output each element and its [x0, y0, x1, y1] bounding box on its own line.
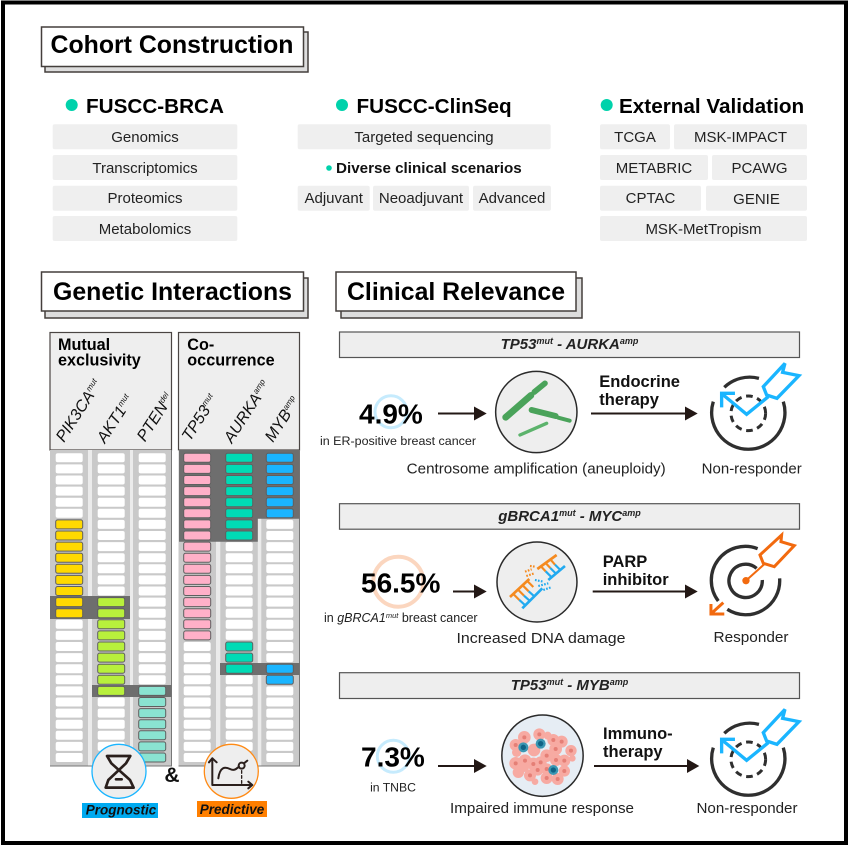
heading: Cohort Construction: Cohort Construction [50, 31, 294, 59]
panel: External Validation: GENIE [733, 191, 780, 208]
gene label: PIK3CA mut: mut [84, 376, 99, 393]
header: TP53 mut - MYB amp: - MYB [563, 677, 610, 694]
icon: DNA damage [497, 542, 577, 622]
panel: FUSCC-BRCA: Genomics [111, 129, 179, 146]
header: gBRCA1 mut - MYC amp: gBRCA1 [498, 508, 559, 525]
panel: External Validation: External Validation [619, 95, 804, 118]
header: TP53 mut - AURKA amp: amp [620, 336, 639, 346]
caption: Impaired immune response: Impaired immune response [450, 801, 634, 817]
gene label: TP53 mut: TP53 [179, 403, 214, 444]
panel: Co-occurrence [178, 332, 304, 766]
caption: Centrosome amplification: Centrosome amplification (aneuploidy) [407, 462, 666, 478]
arrow [594, 759, 699, 773]
panel: External Validation [600, 95, 807, 241]
panel: External Validation: CPTAC [626, 190, 676, 207]
ampersand: & [164, 764, 180, 787]
header: gBRCA1 mut - MYC amp: amp [622, 508, 641, 518]
column: AURKA cells [226, 453, 253, 762]
label: therapy Endocrine: Endocrine [599, 373, 680, 391]
panel: FUSCC-BRCA: Proteomics [107, 190, 183, 207]
panel: FUSCC-ClinSeq: Targeted sequencing [354, 129, 494, 146]
arrow [593, 584, 698, 598]
gene label: TP53 mut: mut [200, 391, 215, 408]
panel: FUSCC-ClinSeq: Adjuvant [305, 190, 364, 207]
panel: FUSCC-BRCA: Transcriptomics [92, 160, 198, 177]
label: Immunotherapy: therapy [603, 743, 663, 761]
column: AKT1 cells [98, 453, 125, 762]
header: gBRCA1 mut - MYC amp [340, 504, 800, 529]
header: gBRCA1 mut - MYC amp: mut [559, 508, 577, 518]
icon: prognostic hourglass [92, 744, 146, 798]
header: TP53 mut - MYB amp: amp [610, 677, 629, 687]
gene label: MYB amp: MYB [262, 407, 295, 445]
panel: FUSCC-ClinSeq: Diverse clinical scenarios [336, 160, 522, 177]
panel: FUSCC-ClinSeq [298, 95, 551, 211]
gene label: PIK3CA mut: PIK3CA [53, 388, 98, 445]
column: PIK3CA cells [56, 453, 83, 762]
panel: External Validation: MSK-IMPACT [694, 129, 787, 146]
label: PARP inhibitor [603, 553, 669, 589]
stat: 56.5 percent: 56.5% [361, 568, 440, 598]
label: Immunotherapy: Immuno- [603, 725, 673, 743]
icon: non-responder target [712, 709, 799, 795]
icon: responder target [711, 535, 794, 615]
caption: Increased DNA damage: Increased DNA damage [456, 631, 626, 647]
panel: Mutual exclusivity: Mutual [58, 336, 110, 354]
header: TP53 mut - MYB amp [340, 673, 800, 698]
arrow [438, 406, 487, 420]
caption: Responder: Responder [714, 630, 789, 646]
caption: in gBRCA1 mut breast cancer: in gBRCA1 [324, 611, 386, 625]
heading: Genetic Interactions: Genetic Interactions [53, 278, 292, 306]
panel: External Validation: METABRIC [616, 160, 692, 177]
panel: Co-occurrence: occurrence [187, 352, 275, 370]
icon: centrosome chromosomes [496, 371, 577, 453]
panel: External Validation: PCAWG [731, 160, 788, 177]
label: PARP inhibitor: inhibitor [603, 571, 669, 589]
label: therapy Endocrine: therapy [599, 391, 660, 409]
column: MYB cells [266, 453, 293, 762]
panel: FUSCC-BRCA: Metabolomics [99, 221, 191, 238]
heading: Clinical Relevance [336, 272, 582, 318]
heading: Cohort Construction [42, 27, 308, 72]
panel: FUSCC-ClinSeq: Neoadjuvant [379, 190, 464, 207]
gene label: AURKA amp: AURKA [221, 391, 265, 446]
panel: Mutual exclusivity [50, 332, 178, 766]
header: gBRCA1 mut - MYC amp: - MYC [576, 508, 623, 525]
panel: External Validation: MSK-MetTropism [645, 221, 762, 238]
gene label: PTEN del: del [157, 390, 171, 405]
icon: non-responder target [712, 363, 799, 449]
arrow [591, 406, 698, 420]
heading: Genetic Interactions [42, 272, 308, 318]
panel: FUSCC-BRCA: FUSCC-BRCA [86, 95, 224, 118]
header: TP53 mut - AURKA amp [340, 332, 800, 358]
label: Prognostic: Prognostic [86, 802, 157, 818]
column: PTEN cells [139, 453, 166, 762]
icon: predictive curve [204, 744, 258, 798]
header: TP53 mut - AURKA amp: mut [536, 336, 554, 346]
gene label: MYB amp: amp [281, 393, 297, 412]
arrow [438, 759, 487, 773]
header: TP53 mut - AURKA amp: - AURKA [553, 336, 620, 353]
arrow [453, 584, 487, 598]
caption: in gBRCA1 mut breast cancer: breast cancer [398, 611, 478, 625]
panel: FUSCC-BRCA [53, 95, 237, 241]
gene label: PTEN del: PTEN [134, 400, 172, 445]
caption: in TNBC: in TNBC [370, 780, 416, 794]
panel: Mutual exclusivity: exclusivity [58, 352, 141, 370]
heading: Clinical Relevance: Clinical Relevance [347, 278, 565, 306]
gene label: AKT1 mut: AKT1 [94, 403, 130, 446]
label: therapy Endocrine [599, 373, 680, 409]
header: TP53 mut - AURKA amp: TP53 [501, 336, 536, 353]
column: TP53 cells [184, 453, 211, 762]
panel: FUSCC-ClinSeq: FUSCC-ClinSeq [356, 95, 512, 118]
header: TP53 mut - MYB amp: mut [547, 677, 564, 687]
stat: 7.3 percent: 7.3% [361, 742, 425, 772]
label: Immunotherapy [603, 725, 673, 761]
gene label: AURKA amp: amp [251, 377, 267, 396]
label: Predictive: Predictive [200, 802, 265, 817]
icon: tumor cells with immune cells [502, 715, 583, 796]
panel: FUSCC-ClinSeq: Advanced [479, 190, 545, 207]
panel: Co-occurrence: Co- [187, 336, 214, 354]
panel: External Validation: TCGA [614, 129, 656, 146]
stat: 56.5 percent [361, 557, 440, 607]
caption: in ER-positive breast cancer: in ER-positive breast cancer [320, 434, 476, 448]
stat: 4.9 percent: 4.9% [359, 398, 423, 430]
caption: Non-responder: Non-responder [696, 801, 798, 817]
gene label: AKT1 mut: mut [116, 392, 131, 408]
label: PARP inhibitor: PARP [603, 553, 647, 571]
header: TP53 mut - MYB amp: TP53 [511, 677, 547, 694]
caption: Non-responder: Non-responder [702, 462, 802, 478]
caption: in gBRCA1 mut breast cancer: mut [386, 611, 399, 620]
